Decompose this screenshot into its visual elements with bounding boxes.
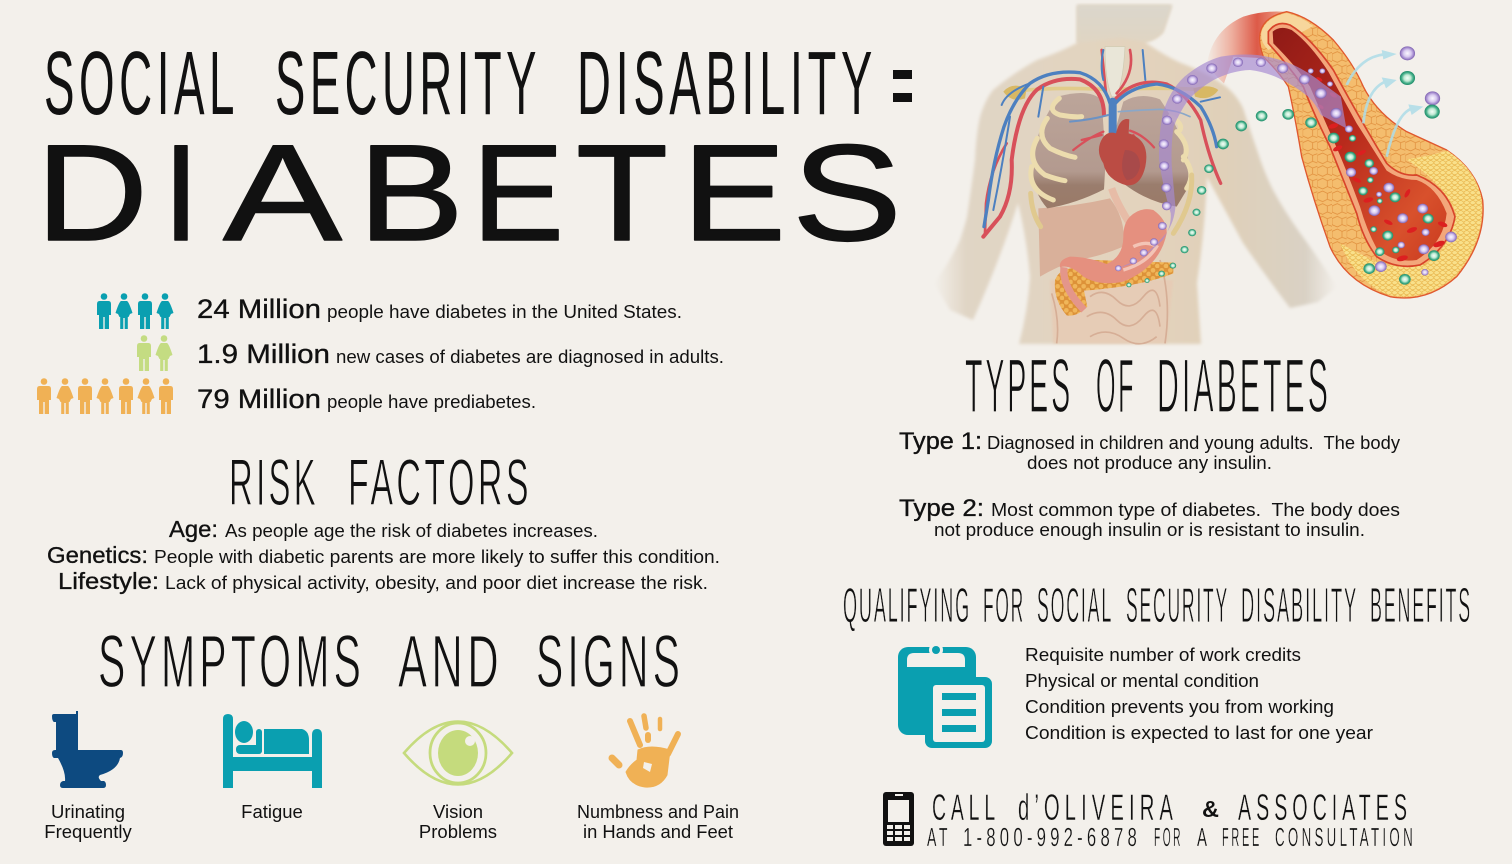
heading: types of diabetes: OF	[1096, 344, 1136, 429]
arrow: purple glucose path	[1118, 54, 1346, 268]
statistic: 79 million: people have prediabetes.	[327, 391, 536, 412]
type 1 description	[899, 428, 1401, 473]
title: social security disability	[44, 34, 912, 134]
red blood cells	[1316, 76, 1448, 262]
heading: qualifying for benefits: QUALIFYING	[843, 579, 971, 633]
call to action: d’OLIVEIRA	[1018, 787, 1178, 828]
symptom: urinating frequently: Frequently	[44, 821, 132, 842]
call to action: FOR	[1154, 822, 1183, 852]
type 2 description: Most common type of diabetes. The body does	[991, 499, 1400, 520]
red vessels	[983, 50, 1221, 237]
heading: symptoms and signs: SYMPTOMS	[98, 620, 365, 703]
type 1 description: does not produce any insulin.	[1027, 452, 1272, 473]
duodenum	[1064, 267, 1084, 310]
statistic: 1.9 million: 1.9 Million	[197, 339, 330, 369]
pancreas organ	[1055, 260, 1173, 316]
statistic: 1.9 million	[197, 339, 724, 369]
symptom: numbness and pain	[577, 716, 739, 842]
people icons: 79 million	[37, 378, 173, 414]
qualifying list: Requisite number of work credits	[1025, 644, 1301, 665]
type 1 description: Diagnosed in children and young adults. The body	[987, 432, 1401, 453]
trachea	[1105, 47, 1125, 97]
title: diabetes: T	[576, 117, 668, 270]
risk factors text: People with diabetic parents are more likely to suffer this condition.	[154, 546, 720, 567]
statistic: 24 million: 24 Million	[197, 294, 321, 324]
torso silhouette	[934, 5, 1337, 344]
statistic: 79 million: 79 Million	[197, 384, 321, 414]
risk factors text: Lack of physical activity, obesity, and poor diet increase the risk.	[165, 572, 708, 593]
icon: phone	[883, 792, 914, 846]
heading: risk factors: RISK	[229, 445, 319, 519]
purple molecules	[1115, 46, 1457, 276]
heading: risk factors: FACTORS	[348, 445, 532, 519]
lumen with blood	[1273, 28, 1447, 261]
top pale wall	[1261, 13, 1313, 50]
statistic: 24 million: people have diabetes in the United States.	[327, 301, 682, 322]
qualifying list: Condition is expected to last for one year	[1025, 722, 1373, 743]
blue vessels	[984, 50, 1220, 227]
icon: toilet	[52, 711, 123, 788]
title: social security disability: SOCIAL	[44, 34, 239, 134]
heading: risk factors	[229, 445, 532, 519]
neck shade	[1077, 5, 1172, 43]
heading: qualifying for benefits	[843, 579, 1472, 633]
title: diabetes: B	[358, 117, 464, 270]
call to action: CALL	[932, 787, 1000, 828]
collarbones	[1003, 86, 1218, 100]
title: social security disability: SECURITY	[275, 34, 541, 134]
stomach	[1060, 209, 1167, 283]
artery dome	[1207, 12, 1287, 83]
icon: bed	[223, 714, 322, 788]
type 2 description: Type 2:	[899, 495, 984, 522]
title: social security disability: DISABILITY	[577, 34, 877, 134]
tube outer wall	[1260, 12, 1483, 298]
qualifying list	[1025, 644, 1373, 743]
qualifying list: Physical or mental condition	[1025, 670, 1259, 691]
symptom: vision problems: Problems	[419, 821, 497, 842]
symptom: numbness and pain: Numbness and Pain	[577, 801, 739, 822]
icon: hand	[612, 716, 678, 787]
molecules and glucose path	[1115, 46, 1457, 287]
risk factors text: As people age the risk of diabetes increases.	[225, 520, 598, 541]
heading: symptoms and signs: SIGNS	[536, 620, 684, 703]
title: diabetes: A	[223, 117, 343, 270]
illustration: anatomy of body and pancreas	[934, 5, 1483, 344]
call to action: A	[1197, 822, 1207, 852]
title: diabetes: I	[163, 117, 199, 270]
heart	[1099, 119, 1146, 185]
title: diabetes: E	[472, 117, 564, 270]
symptom: numbness and pain: in Hands and Feet	[583, 821, 733, 842]
call to action: FREE	[1222, 822, 1262, 852]
symptom: fatigue	[223, 714, 322, 822]
statistics block	[37, 293, 724, 414]
people icons: 1.9 million	[137, 335, 172, 371]
call to action: 1-800-992-6878	[963, 822, 1141, 852]
inner organs	[983, 47, 1221, 344]
title: diabetes: S	[792, 117, 902, 270]
symptom: fatigue: Fatigue	[241, 801, 303, 822]
statistic: 79 million	[197, 384, 536, 414]
risk factors text: Genetics:	[47, 542, 148, 568]
call to action: AT	[927, 822, 951, 852]
statistic: 1.9 million: new cases of diabetes are diagnosed in adults.	[336, 346, 724, 367]
arrows: cyan release	[1347, 50, 1423, 157]
symptom: vision problems: Vision	[433, 801, 483, 822]
liver	[1038, 198, 1124, 277]
icon: clipboard	[898, 643, 992, 748]
risk factors text: Lifestyle:	[58, 568, 159, 594]
ribs	[1031, 98, 1192, 233]
symptom: urinating frequently: Urinating	[51, 801, 125, 822]
risk factors text	[47, 516, 720, 594]
symptom: urinating frequently	[44, 711, 132, 842]
yellow fat layer	[1340, 151, 1482, 297]
type 2 description	[899, 495, 1400, 540]
heading: qualifying for benefits: SECURITY	[1126, 579, 1229, 633]
intestines	[1050, 260, 1173, 344]
risk factors text: Age:	[169, 516, 218, 542]
title: diabetes: E	[682, 117, 786, 270]
title: diabetes: D	[36, 117, 148, 270]
symptom: vision problems	[404, 722, 512, 842]
lungs	[1033, 93, 1106, 208]
inner wall	[1268, 23, 1455, 266]
people icons: 24 million	[97, 293, 174, 329]
pancreas cross section	[1207, 12, 1483, 298]
heading: types of diabetes: TYPES	[965, 344, 1073, 429]
heading: symptoms and signs: AND	[398, 620, 503, 703]
type 1 description: Type 1:	[899, 428, 982, 455]
statistic: 24 million	[197, 294, 682, 324]
esophagus	[1112, 188, 1132, 227]
green molecules	[1126, 71, 1440, 287]
qualifying list: Condition prevents you from working	[1025, 696, 1334, 717]
call to action	[927, 787, 1416, 852]
icon: eye	[404, 722, 512, 784]
type 2 description: not produce enough insulin or is resistant to insulin.	[934, 519, 1365, 540]
heading: qualifying for benefits: FOR	[983, 579, 1025, 633]
heading: qualifying for benefits: SOCIAL	[1037, 579, 1113, 633]
call to action: &	[1202, 796, 1219, 822]
